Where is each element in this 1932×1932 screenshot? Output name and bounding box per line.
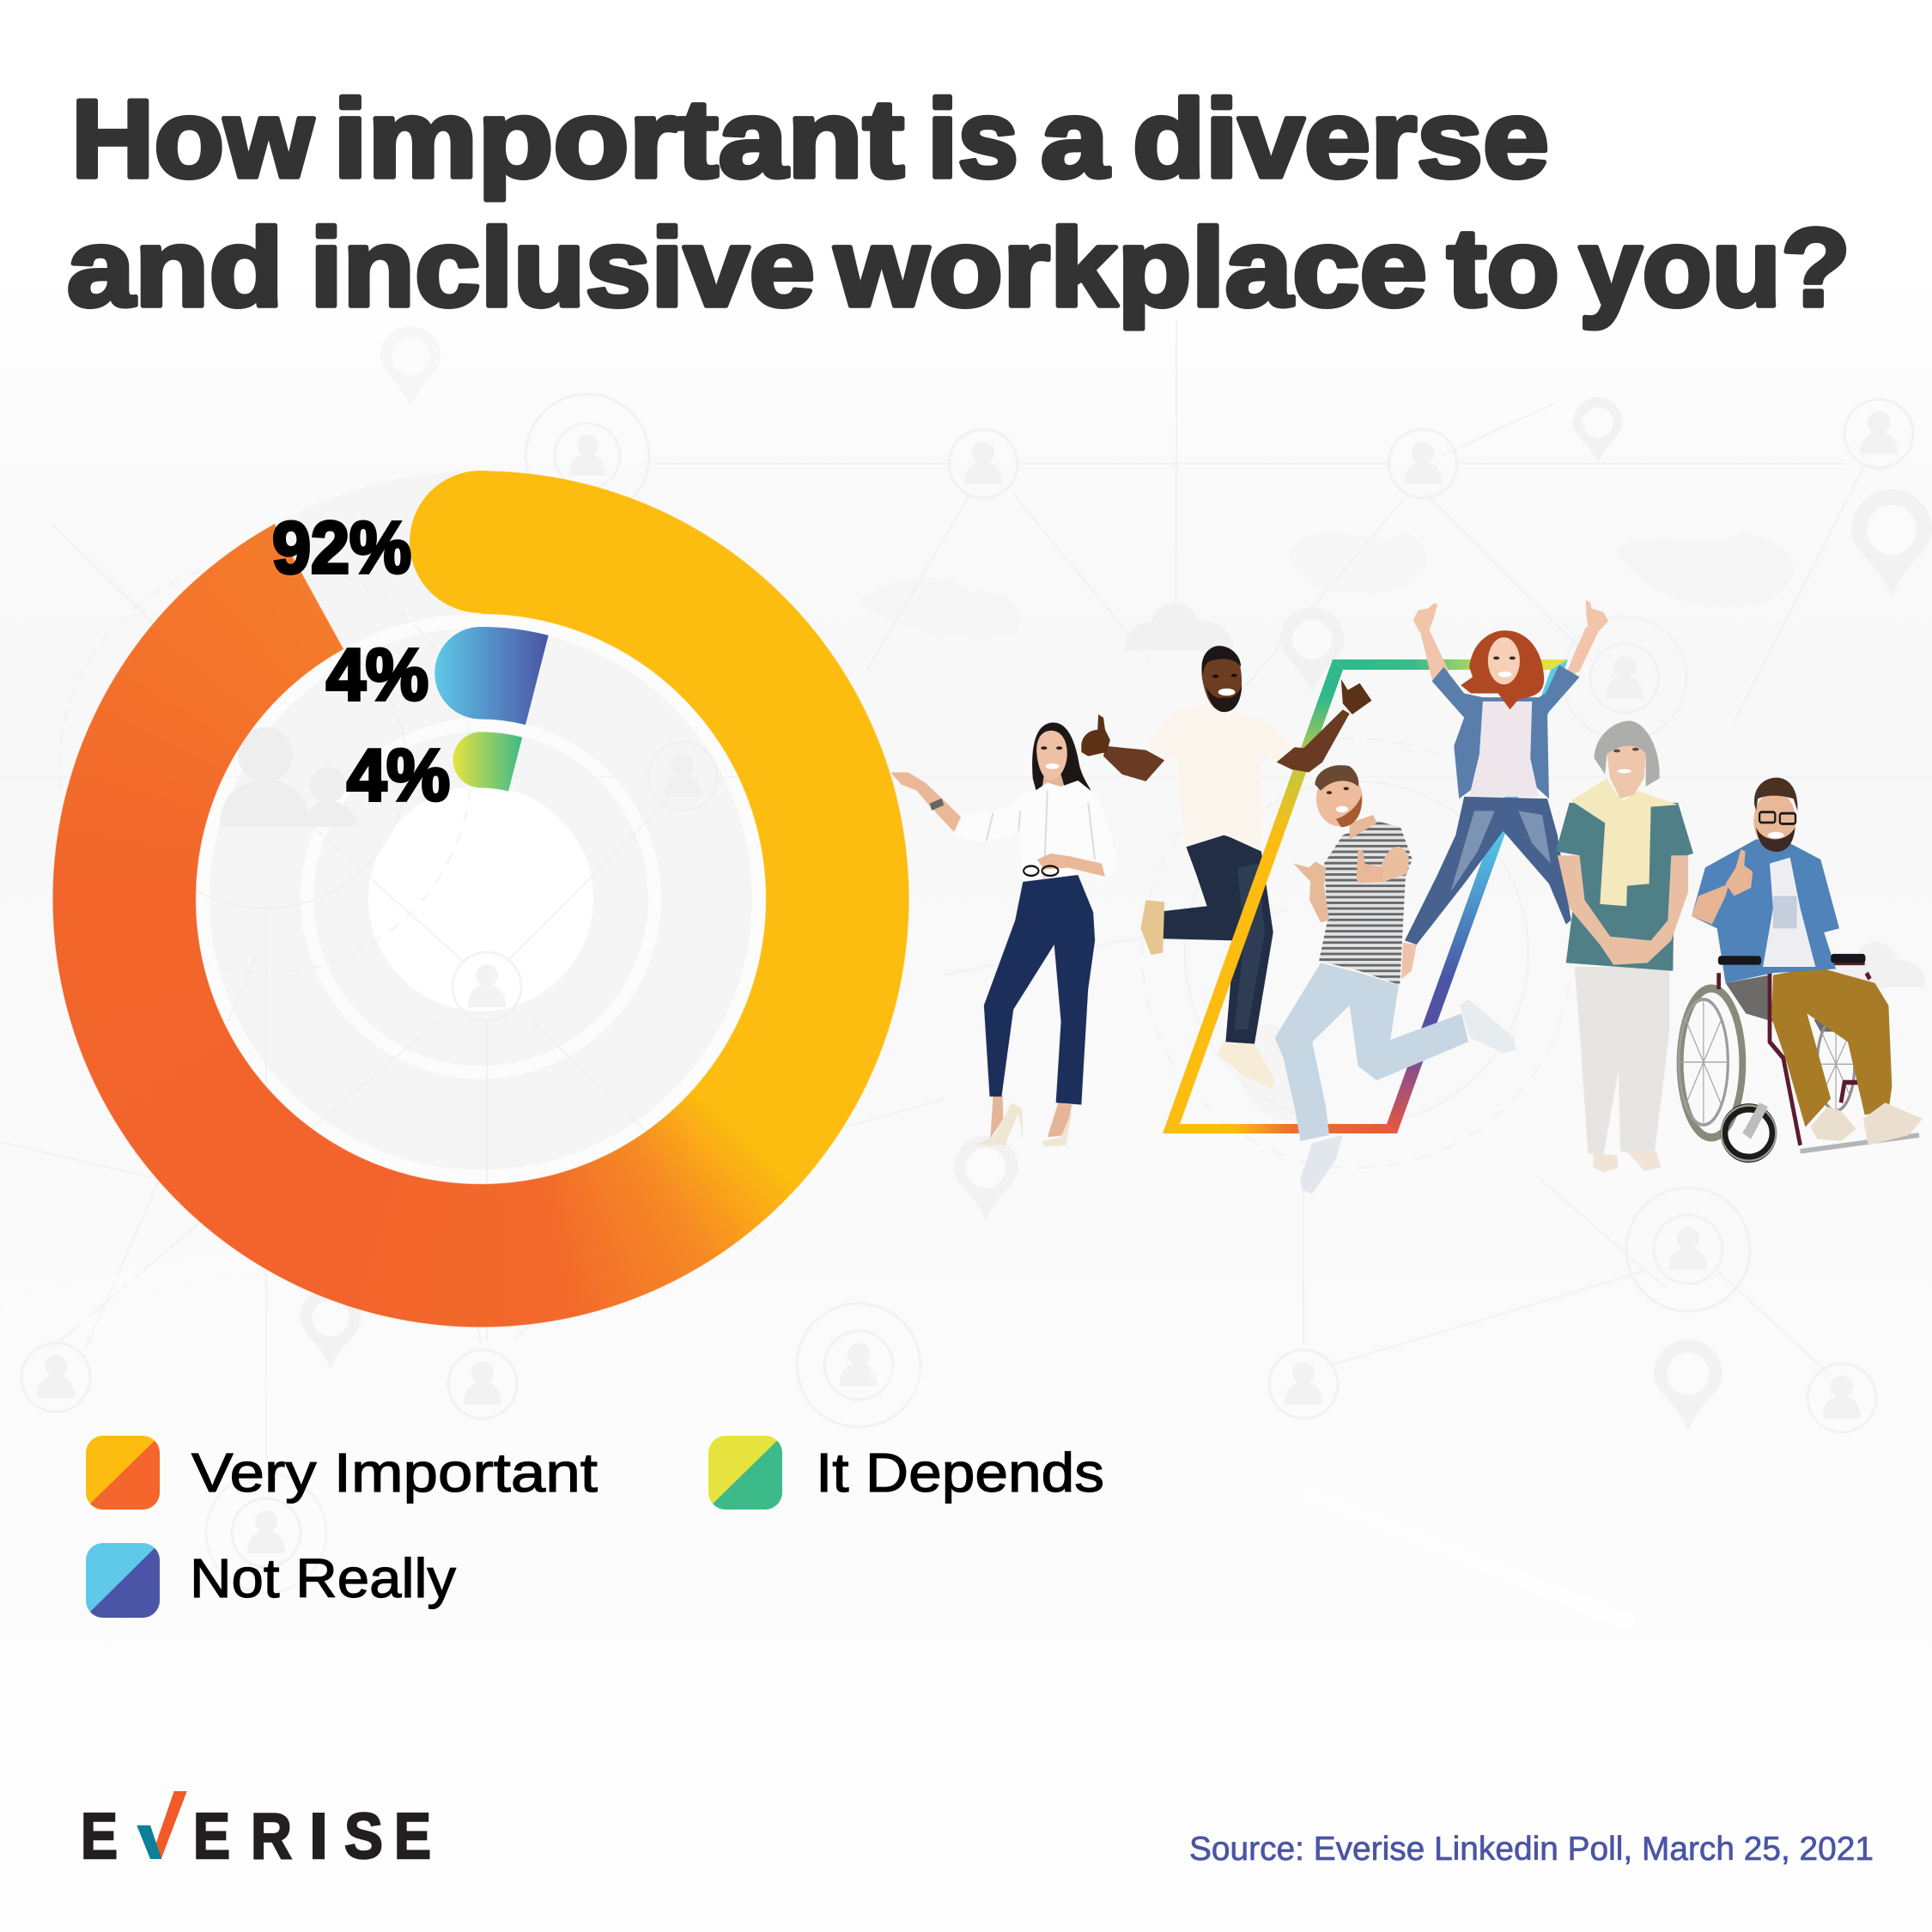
- title: you?: [1579, 206, 1850, 330]
- person: man in white t-shirt, raised arm: [1277, 679, 1371, 772]
- legend labels: It Depends: [816, 1442, 1104, 1504]
- title: and: [67, 206, 283, 330]
- legend swatch: Very Important: [86, 1436, 160, 1510]
- legend labels: Not Really: [190, 1547, 456, 1609]
- legend swatch: Not Really: [86, 1543, 160, 1618]
- title: diverse: [1133, 77, 1549, 201]
- title: is: [927, 77, 1018, 201]
- donut segment: 92% Very Important: [52, 470, 910, 1328]
- title: to: [1447, 206, 1559, 330]
- logo: Everise: S: [344, 1800, 383, 1872]
- percent labels: 92%: [272, 507, 411, 589]
- title: How: [71, 77, 314, 201]
- title: workplace: [834, 206, 1427, 330]
- percent labels: [272, 507, 450, 817]
- person: man in wheelchair with thumb up: [1679, 778, 1923, 1161]
- title: a: [1041, 77, 1109, 201]
- person: older woman in teal top and white trousers: [1556, 720, 1693, 1172]
- gradient parallelogram frame: [1163, 659, 1568, 1133]
- percent labels: 4%: [347, 735, 450, 817]
- title: important: [333, 77, 904, 201]
- source note: Source: Everise Linkedin Poll, March 25, 2021: [1189, 1831, 1874, 1868]
- logo: Everise: E: [394, 1800, 431, 1872]
- legend labels: [190, 1442, 1104, 1609]
- person: man in white t-shirt, body: [1081, 646, 1295, 1089]
- title: inclusive: [310, 206, 815, 330]
- person: woman in white blouse and navy trousers: [890, 722, 1120, 1146]
- title: [67, 77, 1850, 330]
- legend labels: Very Important: [191, 1442, 598, 1504]
- logo: Everise: E: [193, 1800, 230, 1872]
- logo: Everise: R: [251, 1800, 292, 1872]
- logo: Everise: E: [81, 1800, 118, 1872]
- donut segment: 4% Not Really: [434, 627, 549, 725]
- legend swatch: It Depends: [708, 1436, 782, 1510]
- wheelchair: [1679, 963, 1919, 1161]
- donut rounded cap: [410, 471, 552, 613]
- percent labels: 4%: [326, 635, 428, 716]
- person: man in striped t-shirt and light jeans: [1275, 765, 1516, 1194]
- donut segment: 4% It Depends: [453, 732, 522, 792]
- logo: Everise: I: [309, 1800, 328, 1872]
- person: red-haired woman jumping: [1401, 600, 1608, 979]
- logo: Everise: [81, 1791, 431, 1872]
